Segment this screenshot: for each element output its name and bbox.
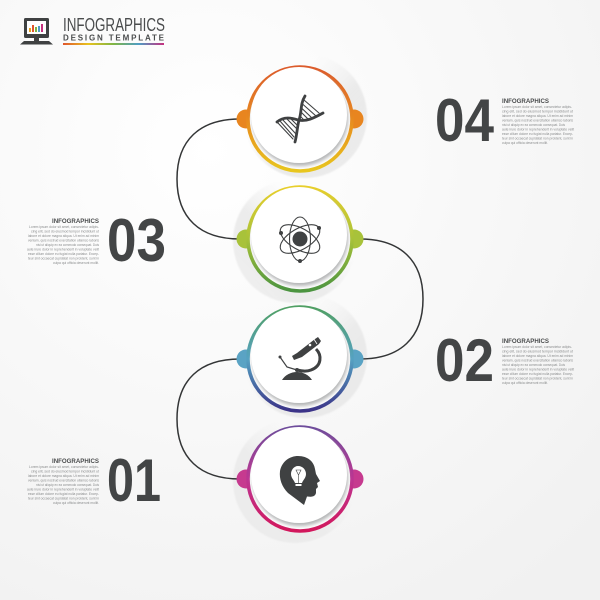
text block 04: esse cillum dolore eu fugiat nulla pariatur. Excep- (502, 131, 574, 136)
text block 01: labore et dolore magna aliqua. Ut enim ad minim (28, 473, 100, 478)
text block 01: culpa qui officia deserunt mollit. (53, 500, 99, 505)
text block 03: aute irure dolor in reprehenderit in voluptate velit (27, 246, 100, 252)
number 01: 01 (107, 447, 161, 514)
text block 02: nisi ut aliquip ex ea commodo consequat. Duis (502, 362, 565, 367)
text block 03 (27, 218, 100, 265)
text block 03: labore et dolore magna aliqua. Ut enim ad minim (28, 233, 100, 238)
text block 03: INFOGRAPHICS (52, 218, 100, 225)
text block 01: nisi ut aliquip ex ea commodo consequat. Duis (36, 482, 99, 487)
icon: microscope (278, 337, 321, 380)
text block 04: veniam, quis nostrud exercitation ullamco laboris (502, 118, 573, 122)
block 01 (27, 447, 161, 514)
text block 02: esse cillum dolore eu fugiat nulla pariatur. Excep- (502, 371, 574, 376)
text block 02: veniam, quis nostrud exercitation ullamco laboris (502, 358, 573, 362)
halo circles (233, 54, 367, 543)
text block 03: veniam, quis nostrud exercitation ullamco laboris (28, 238, 99, 242)
text block 02 (502, 338, 575, 385)
block 03 (27, 207, 166, 274)
block 04 (435, 87, 575, 154)
text block 01: cing elit, sed do eiusmod tempor incididunt ut (31, 468, 100, 474)
text block 04: culpa qui officia deserunt mollit. (502, 140, 548, 145)
step 4 node: DNA (236, 67, 364, 171)
number 02: 02 (435, 327, 494, 394)
text block 01 (27, 458, 100, 505)
icon: dna (277, 96, 323, 142)
text block 04 (502, 98, 575, 145)
subtitle: DESIGN TEMPLATE (63, 34, 165, 42)
text block 04: cing elit, sed do eiusmod tempor incididunt ut (502, 108, 574, 114)
text block 03: Lorem ipsum dolor sit amet, consectetur adipis- (29, 224, 100, 229)
text block 04: aute irure dolor in reprehenderit in voluptate velit (502, 126, 575, 132)
step 1 node: head with lightbulb (236, 427, 364, 531)
number 04: 04 (435, 87, 495, 154)
text block 01: teur sint occaecat cupidatat non proident, sunt in (28, 496, 99, 500)
text block 04: teur sint occaecat cupidatat non proident, sunt in (502, 136, 573, 140)
icon: head (280, 456, 320, 505)
title: INFOGRAPHICS (63, 15, 165, 35)
step 3 node: atom (236, 187, 364, 291)
number 03: 03 (107, 207, 166, 274)
text block 02: cing elit, sed do eiusmod tempor incididunt ut (502, 348, 574, 354)
text block 03: teur sint occaecat cupidatat non proident, sunt in (28, 256, 99, 260)
header logo (20, 15, 165, 45)
text block 01: INFOGRAPHICS (52, 458, 100, 465)
text block 02: INFOGRAPHICS (502, 338, 550, 345)
text block 02: teur sint occaecat cupidatat non proident, sunt in (502, 376, 573, 380)
text block 02: Lorem ipsum dolor sit amet, consectetur adipis- (502, 344, 573, 349)
text block 03: esse cillum dolore eu fugiat nulla pariatur. Excep- (28, 251, 100, 256)
text block 03: nisi ut aliquip ex ea commodo consequat. Duis (36, 242, 99, 247)
text block 03: culpa qui officia deserunt mollit. (53, 260, 99, 265)
text block 01: Lorem ipsum dolor sit amet, consectetur adipis- (29, 464, 100, 469)
text block 04: INFOGRAPHICS (502, 98, 550, 105)
text block 02: culpa qui officia deserunt mollit. (502, 380, 548, 385)
text block 01: esse cillum dolore eu fugiat nulla pariatur. Excep- (28, 491, 100, 496)
text block 04: nisi ut aliquip ex ea commodo consequat. Duis (502, 122, 565, 127)
icon: atom (276, 217, 324, 263)
icon: computer monitor (20, 18, 53, 44)
block 02 (435, 327, 575, 394)
text block 01: aute irure dolor in reprehenderit in voluptate velit (27, 486, 100, 492)
connector curves (177, 119, 423, 479)
text block 02: aute irure dolor in reprehenderit in voluptate velit (502, 366, 575, 372)
text block 01: veniam, quis nostrud exercitation ullamco laboris (28, 478, 99, 482)
rainbow bar (63, 43, 164, 45)
text block 02: labore et dolore magna aliqua. Ut enim ad minim (502, 353, 574, 358)
step 2 node: microscope (236, 307, 364, 411)
text block 04: labore et dolore magna aliqua. Ut enim ad minim (502, 113, 574, 118)
text block 03: cing elit, sed do eiusmod tempor incididunt ut (31, 228, 100, 234)
text block 04: Lorem ipsum dolor sit amet, consectetur adipis- (502, 104, 573, 109)
